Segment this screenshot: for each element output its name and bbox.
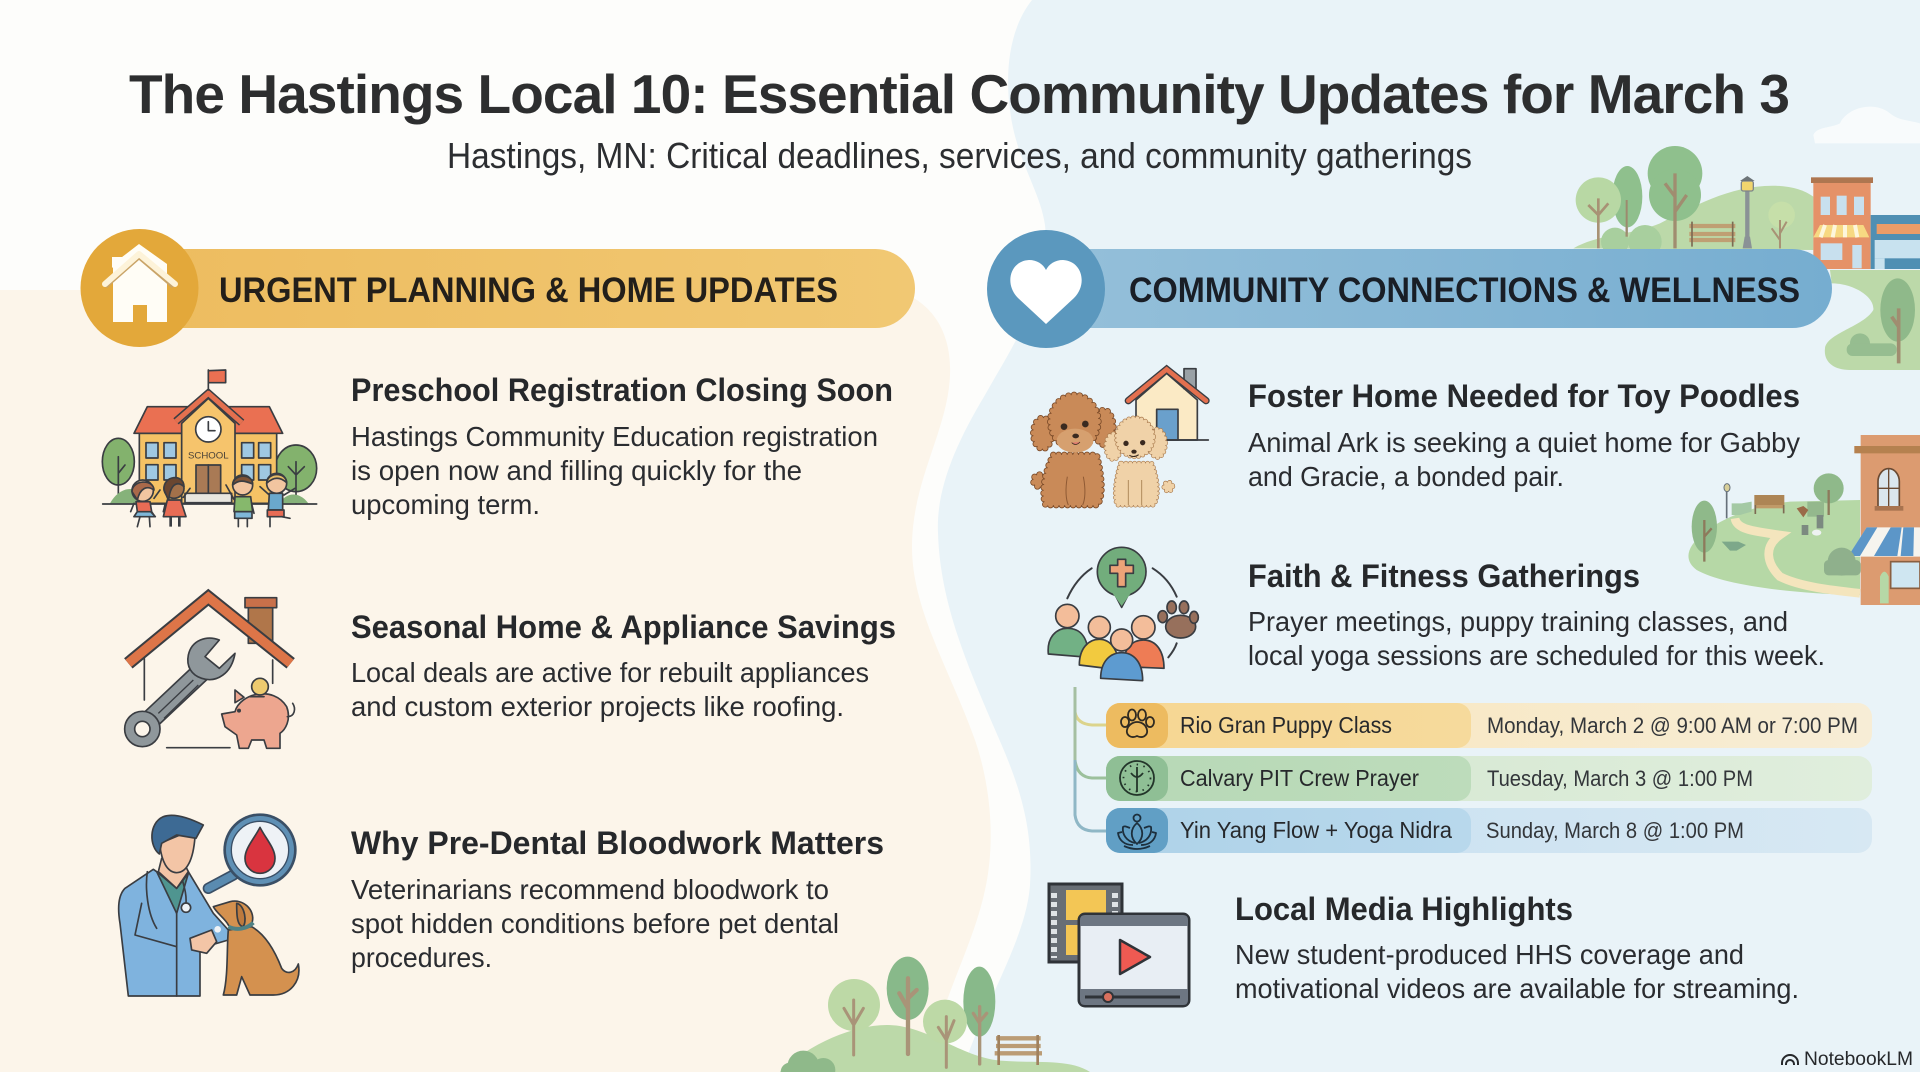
text block: pre-dental bloodwork: Why Pre-Dental Bloodwork Matters [351, 825, 884, 861]
NotebookLM mark: NotebookLM [1804, 1049, 1913, 1070]
child figure 3 [226, 475, 254, 527]
heading: URGENT PLANNING & HOME UPDATES [219, 271, 838, 310]
schedule: Calvary PIT Crew Prayer: Calvary PIT Crew Prayer [1180, 765, 1419, 791]
scenery: top right park and shops [1573, 107, 1920, 370]
subtitle: Hastings, MN: Critical deadlines, services, and community gatherings [447, 135, 1472, 176]
icon: clock cross [1120, 761, 1154, 795]
schedule: Calvary PIT Crew Prayer [1106, 756, 1872, 801]
icon: toy poodles and house [1033, 369, 1208, 505]
text block: preschool registration: upcoming term. [351, 489, 540, 520]
icon: faith and fitness group [1048, 547, 1198, 681]
text block: preschool registration [351, 372, 893, 520]
text block: local media: Local Media Highlights [1235, 891, 1573, 927]
text block: home and appliance savings: Seasonal Home & Appliance Savings [351, 609, 896, 645]
text block: faith and fitness: Prayer meetings, puppy training classes, and [1248, 606, 1788, 637]
title: The Hastings Local 10: Essential Community Updates for March 3 [129, 63, 1790, 125]
scenery: mid right park and storefront [1688, 435, 1920, 605]
text block: home and appliance savings: and custom exterior projects like roofing. [351, 691, 844, 722]
text block: faith and fitness: Faith & Fitness Gatherings [1248, 558, 1640, 594]
house [1128, 369, 1208, 440]
text block: local media [1235, 891, 1799, 1004]
text block: pre-dental bloodwork: procedures. [351, 942, 492, 973]
schedule: Yin Yang Flow + Yoga Nidra: Yin Yang Flow + Yoga Nidra [1180, 817, 1452, 843]
icon: paw [1121, 710, 1154, 737]
icon: school with children: SCHOOL [188, 450, 229, 460]
text block: faith and fitness: local yoga sessions are scheduled for this week. [1248, 640, 1825, 671]
icon: film strip and video player [1049, 884, 1189, 1006]
schedule: Rio Gran Puppy Class: Monday, March 2 @ 9:00 AM or 7:00 PM [1487, 713, 1858, 738]
small poodle [1106, 418, 1173, 505]
heading: COMMUNITY CONNECTIONS & WELLNESS [1129, 271, 1800, 310]
icon: heart badge [987, 230, 1105, 348]
text block: pre-dental bloodwork: Veterinarians recommend bloodwork to [351, 874, 829, 905]
schedule: Yin Yang Flow + Yoga Nidra: Sunday, March 8 @ 1:00 PM [1486, 818, 1744, 843]
schedule: Yin Yang Flow + Yoga Nidra [1106, 808, 1872, 853]
schedule: Rio Gran Puppy Class [1106, 703, 1872, 748]
scenery: bottom centre trees and bench [780, 957, 1090, 1072]
panel: urgent planning header [80, 229, 915, 347]
text block: faith and fitness [1248, 558, 1825, 671]
icon: lotus [1118, 814, 1156, 849]
icon: vet with dog and blood drop [119, 813, 299, 996]
child figure 4 [260, 473, 295, 527]
schedule connector [1075, 687, 1107, 831]
text block: local media: motivational videos are available for streaming. [1235, 973, 1799, 1004]
text block: foster home: Animal Ark is seeking a quiet home for Gabby [1248, 427, 1800, 458]
icon: school with children [102, 370, 317, 527]
text block: pre-dental bloodwork [351, 825, 884, 973]
text block: home and appliance savings: Local deals are active for rebuilt appliances [351, 657, 869, 688]
text block: preschool registration: Preschool Registration Closing Soon [351, 372, 893, 408]
text block: preschool registration: is open now and filling quickly for the [351, 455, 802, 486]
text block: pre-dental bloodwork: spot hidden conditions before pet dental [351, 908, 839, 939]
text block: preschool registration: Hastings Community Education registration [351, 421, 878, 452]
child figure 1 [131, 480, 160, 527]
schedule: Calvary PIT Crew Prayer: Tuesday, March 3 @ 1:00 PM [1487, 766, 1753, 791]
child figure 2 [163, 478, 190, 527]
panel: community connections header [987, 230, 1832, 348]
text block: foster home [1248, 378, 1800, 492]
schedule: Rio Gran Puppy Class: Rio Gran Puppy Class [1180, 712, 1392, 738]
text block: foster home: Foster Home Needed for Toy Poodles [1248, 378, 1800, 414]
text block: local media: New student-produced HHS coverage and [1235, 939, 1744, 970]
large poodle [1033, 395, 1113, 505]
text block: home and appliance savings [351, 609, 896, 722]
icon: house, wrench and piggy bank [125, 597, 294, 748]
text block: foster home: and Gracie, a bonded pair. [1248, 461, 1564, 492]
icon: home badge [80, 229, 198, 347]
